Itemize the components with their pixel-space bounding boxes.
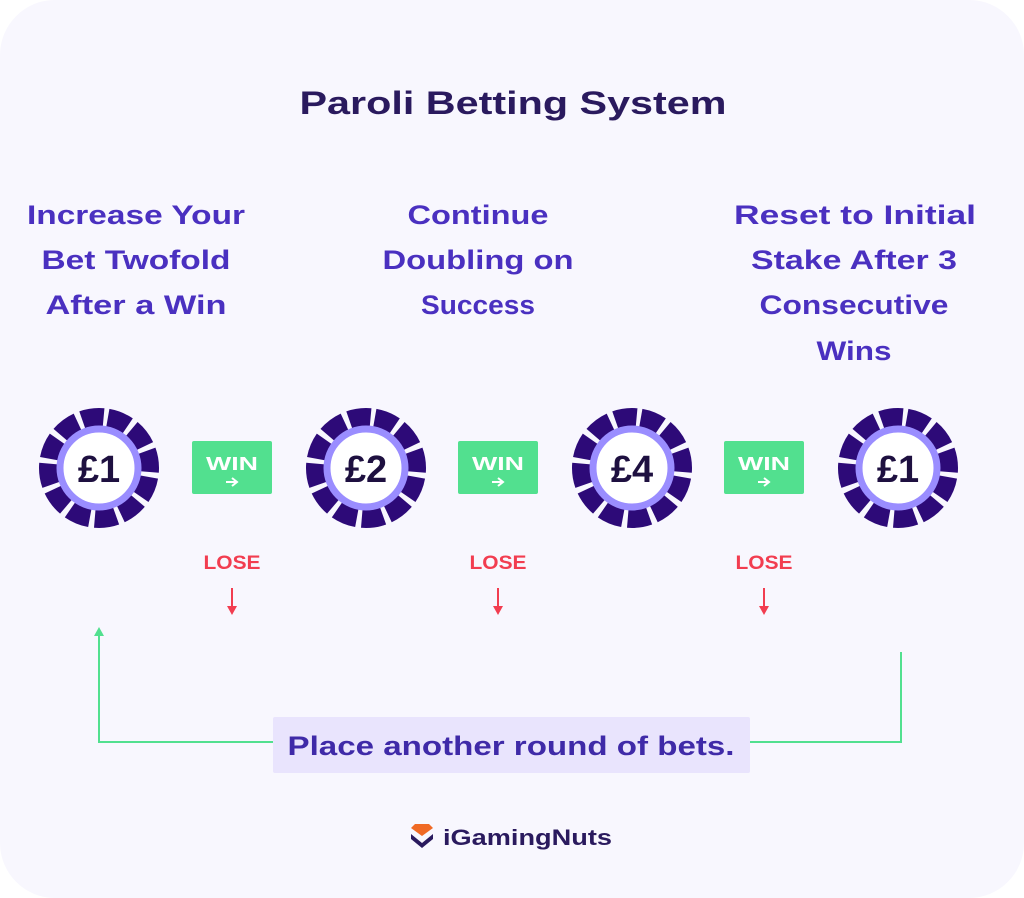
heading: step 1: After a Win: [46, 290, 226, 320]
win box 1: [192, 441, 272, 494]
chip: £1 reset: [840, 410, 956, 526]
chip: £4: £4: [611, 449, 653, 491]
heading: step 1: Increase Your: [27, 200, 246, 230]
callout: place another round: [273, 717, 750, 773]
chip: £2: £2: [345, 449, 387, 491]
heading: step 2: Success: [421, 290, 535, 320]
lose 2: LOSE: [470, 553, 526, 574]
arrow: loop back: [94, 627, 901, 742]
heading: step 1: [27, 200, 246, 320]
lose 3: [736, 553, 792, 615]
heading: step 3: Reset to Initial: [734, 200, 976, 230]
chip: £2: [308, 410, 424, 526]
heading: step 1: Bet Twofold: [42, 245, 230, 275]
heading: step 2: Continue: [408, 200, 548, 230]
win box 1: WIN: [206, 454, 258, 474]
chip: £1: [41, 410, 157, 526]
heading: step 3: [734, 200, 976, 366]
chip: £1 reset: £1: [877, 449, 919, 491]
callout: place another round: Place another round of bets.: [288, 731, 734, 761]
lose 3: LOSE: [736, 553, 792, 574]
win box 2: [458, 441, 538, 494]
heading: step 3: Wins: [816, 336, 892, 366]
chip: £4: [574, 410, 690, 526]
heading: step 2: [382, 200, 574, 320]
title: Paroli Betting System: [300, 85, 726, 121]
win box 3: WIN: [738, 454, 790, 474]
heading: step 3: Consecutive: [760, 290, 948, 320]
logo: iGamingNuts: [443, 825, 612, 850]
lose 2: [470, 553, 526, 615]
logo: [411, 824, 612, 850]
win box 3: [724, 441, 804, 494]
lose 1: [204, 553, 260, 615]
heading: step 2: Doubling on: [382, 245, 574, 275]
win box 2: WIN: [472, 454, 524, 474]
heading: step 3: Stake After 3: [751, 245, 957, 275]
lose 1: LOSE: [204, 553, 260, 574]
chip: £1: £1: [78, 449, 120, 491]
